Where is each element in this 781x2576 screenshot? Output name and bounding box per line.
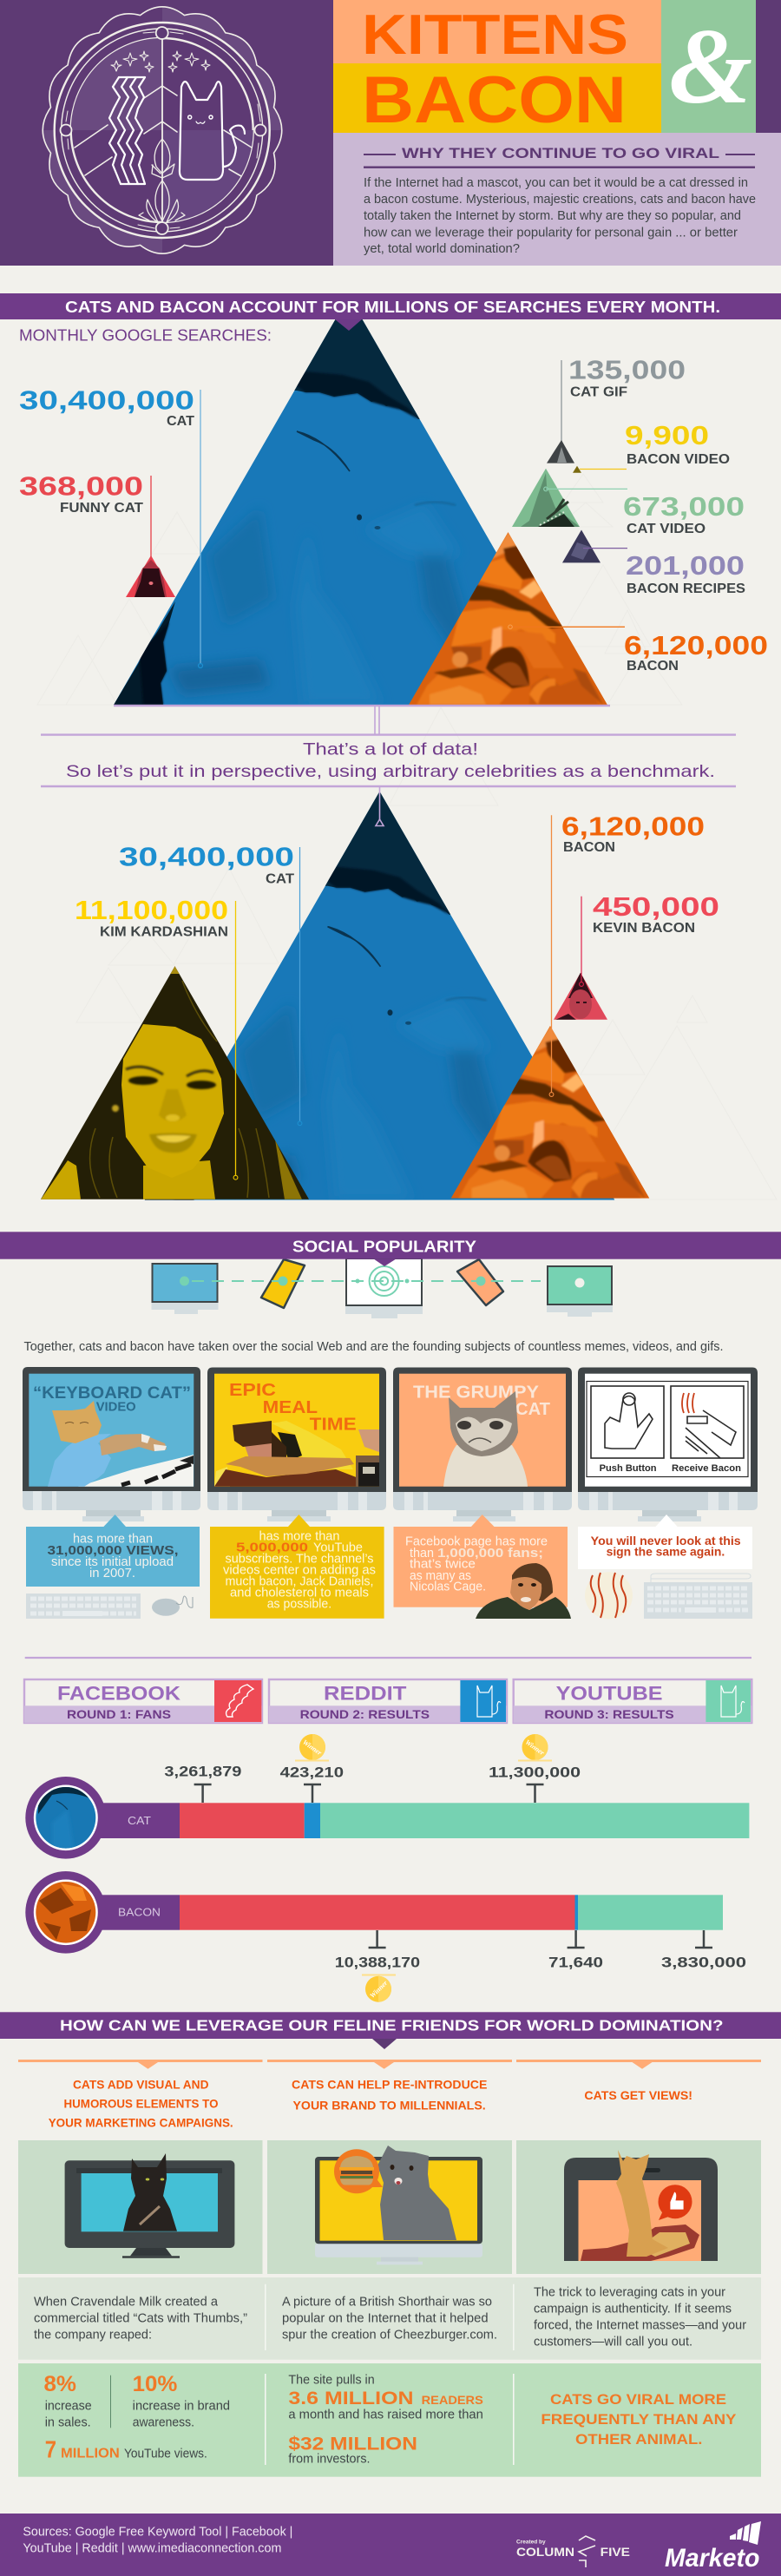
panel: reddit round header	[269, 1679, 507, 1723]
bar chart: bacon: BACON	[118, 1906, 161, 1919]
stat: cravendale results: YouTube views.	[124, 2448, 207, 2461]
screen title: CAT	[515, 1400, 550, 1419]
panel: bacon button monitor: Receive Bacon	[672, 1463, 741, 1474]
data label: cat video 673,000	[544, 487, 745, 536]
callout: never look at this sign: You will never look at this	[591, 1534, 741, 1548]
text block: that's a lot of data: So let’s put it in perspective, using arbitrary celebrities as a benchmark.	[66, 762, 715, 781]
value marker: cat youtube	[489, 1764, 581, 1803]
stat: cravendale results: MILLION	[61, 2447, 120, 2461]
text block: that's a lot of data: That’s a lot of data!	[303, 740, 478, 759]
stat: cravendale results: 10%	[133, 2372, 177, 2396]
stat: cravendale results: awareness.	[133, 2416, 194, 2430]
stat: cravendale results: 8%	[43, 2372, 76, 2396]
bar chart: cat	[25, 1777, 749, 1859]
logo: marketo: Marketo	[665, 2544, 759, 2573]
stat: cheezburger results: The site pulls in	[288, 2374, 375, 2388]
title block: ampersand	[661, 0, 781, 133]
stat: cravendale results: 7	[45, 2436, 56, 2463]
panel: youtube round header	[514, 1679, 751, 1723]
panel: orange cat phone	[516, 2140, 761, 2274]
panel: case study text	[18, 2277, 761, 2360]
image: orange cat	[616, 2150, 668, 2257]
panel: reddit round header: ROUND 2: RESULTS	[300, 1707, 430, 1721]
banner: leverage heading: HOW CAN WE LEVERAGE OUR FELINE FRIENDS FOR WORLD DOMINATION?	[60, 2016, 724, 2034]
text block: cravendale	[34, 2296, 247, 2343]
callout: keyboard cat views: in 2007.	[89, 1567, 135, 1580]
triangle chart: benchmark, kim kardashian	[41, 966, 309, 1199]
callout: cats go viral	[541, 2391, 737, 2448]
callout: never look at this sign: sign the same again.	[607, 1545, 725, 1559]
icon: winner medal facebook	[362, 1974, 396, 2002]
screen title: “KEYBOARD CAT”	[33, 1384, 191, 1403]
value marker: cat youtube: 11,300,000	[489, 1764, 581, 1780]
data label: kevin bacon: KEVIN BACON	[593, 921, 695, 936]
callout: cats go viral: FREQUENTLY THAN ANY	[541, 2411, 737, 2428]
stat: cravendale results	[43, 2372, 230, 2463]
data label: benchmark bacon	[549, 811, 705, 1096]
screen title: VIDEO	[96, 1399, 136, 1414]
logo: column five: FIVE	[601, 2546, 630, 2559]
data label: funny cat 368,000: FUNNY CAT	[60, 501, 143, 516]
stat: cheezburger results: from investors.	[288, 2453, 370, 2467]
title block: BACON: BACON	[362, 63, 627, 137]
panel: facebook round header: ROUND 1: FANS	[67, 1707, 171, 1721]
triangle chart: monthly searches, bacon	[409, 532, 607, 705]
data label: bacon video 9,900	[573, 420, 730, 473]
data label: funny cat 368,000	[19, 470, 175, 597]
text block: british shorthair	[282, 2296, 497, 2343]
banner: searches heading: CATS AND BACON ACCOUNT FOR MILLIONS OF SEARCHES EVERY MONTH.	[65, 299, 720, 316]
data label: benchmark bacon: 6,120,000	[561, 811, 705, 841]
value marker: cat facebook	[164, 1764, 241, 1803]
intro panel	[333, 133, 781, 266]
icon: center monitor	[345, 1258, 423, 1318]
callout: epic meal time subscribers: videos center on adding as	[223, 1564, 376, 1578]
data label: bacon recipes 201,000: 201,000	[626, 550, 745, 581]
column heading: re-introduce brand: YOUR BRAND TO MILLENNIALS.	[293, 2099, 486, 2113]
icon: bacon wave and keyboard	[585, 1572, 752, 1619]
value marker: bacon reddit: 71,640	[548, 1955, 603, 1971]
intro paragraph: If the Internet had a mascot, you can bet it would be a cat dressed in	[364, 176, 748, 190]
panel: results	[18, 2363, 761, 2477]
panel: black cat monitor	[18, 2140, 262, 2274]
icon: left phone	[261, 1259, 305, 1308]
callout: grumpy cat fans: 1,000,000 fans;	[437, 1546, 543, 1561]
header: left purple seal panel	[0, 0, 333, 269]
callout: grumpy cat fans: as many as	[410, 1569, 471, 1583]
banner: social popularity: SOCIAL POPULARITY	[292, 1238, 476, 1255]
avatar: cat	[25, 1777, 106, 1859]
data label: benchmark cat: CAT	[266, 871, 294, 886]
callout: epic meal time subscribers: subscribers. The channel’s	[226, 1553, 373, 1567]
data label: cat video 673,000: CAT VIDEO	[627, 522, 706, 536]
callout: grumpy cat fans: than	[410, 1547, 434, 1561]
logo: marketo	[665, 2521, 761, 2573]
image: black cat	[123, 2153, 177, 2231]
data label: benchmark cat	[119, 842, 302, 1126]
value marker: cat reddit: 423,210	[280, 1764, 344, 1780]
icon: winner medal youtube	[518, 1734, 552, 1762]
intro paragraph: how can we leverage their popularity for personal gain ... or better	[364, 226, 738, 240]
icon: cat	[477, 1686, 501, 1717]
text block: british shorthair: spur the creation of Cheezburger.com.	[282, 2329, 497, 2343]
stat: cravendale results: increase	[45, 2400, 92, 2414]
image: grumpy cat	[443, 1391, 528, 1487]
text block: cravendale: the company reaped:	[34, 2329, 152, 2343]
triangle: bacon recipes	[562, 529, 601, 562]
icon: winner medal reddit	[295, 1734, 329, 1762]
icon: winner medal reddit: Winner	[301, 1738, 324, 1758]
icon: leaves	[139, 139, 185, 222]
triangle: kevin bacon	[554, 972, 607, 1020]
column heading: cats add visual: HUMOROUS ELEMENTS TO	[64, 2097, 219, 2111]
panel: keyboard cat monitor	[23, 1367, 200, 1521]
icon: left monitor	[151, 1264, 219, 1314]
data label: benchmark bacon: BACON	[563, 840, 615, 855]
panel: reddit round header: REDDIT	[324, 1683, 407, 1705]
panel: grumpy cat monitor	[393, 1368, 572, 1521]
divider	[25, 1657, 751, 1659]
text block: authenticity: forced, the Internet masses—and your	[534, 2319, 746, 2333]
image: bacon base	[581, 2224, 699, 2261]
value marker: bacon facebook	[335, 1930, 420, 1971]
callout: cats go viral: OTHER ANIMAL.	[575, 2431, 702, 2448]
data label: benchmark kim kardashian: KIM KARDASHIAN	[100, 924, 228, 939]
banner: searches heading	[0, 293, 781, 331]
screen title: EPIC	[229, 1381, 276, 1400]
callout: epic meal time subscribers: much bacon, Jack Daniels,	[226, 1575, 373, 1589]
data label: bacon 6,120,000: 6,120,000	[624, 630, 768, 660]
screen title	[413, 1383, 550, 1419]
callout: epic meal time subscribers: 5,000,000	[236, 1541, 308, 1555]
data label: cat 30,400,000: CAT	[167, 414, 194, 429]
panel: facebook round header: FACEBOOK	[57, 1683, 180, 1705]
banner: leverage heading	[0, 2012, 781, 2049]
screen title	[33, 1384, 191, 1414]
panel: bacon button monitor	[578, 1368, 758, 1521]
value marker: bacon reddit	[548, 1930, 603, 1971]
avatar: bacon	[25, 1871, 106, 1954]
logo: column five: COLUMN	[516, 2546, 574, 2559]
triangle: cat gif	[547, 440, 574, 463]
data label: bacon recipes 201,000	[583, 549, 745, 596]
callout: grumpy cat fans: Facebook page has more	[405, 1535, 548, 1549]
panel: youtube round header: YOUTUBE	[556, 1683, 663, 1705]
intro paragraph: a bacon costume. Mysterious, majestic creations, cats and bacon have	[364, 193, 756, 207]
footer	[0, 2514, 781, 2576]
stat: cravendale results: in sales.	[45, 2416, 91, 2430]
sources: Sources: Google Free Keyword Tool | Facebook |	[23, 2526, 292, 2540]
triangle chart: benchmark, bacon	[451, 1026, 649, 1199]
callout: epic meal time subscribers	[210, 1515, 384, 1619]
image: man on sandwich	[214, 1421, 379, 1487]
screen title: MEAL	[263, 1398, 318, 1417]
data label: bacon video 9,900: BACON VIDEO	[627, 452, 730, 467]
data label: bacon recipes 201,000: BACON RECIPES	[627, 582, 745, 596]
icon: bacon	[226, 1685, 253, 1717]
icon: cat	[721, 1686, 745, 1717]
title block: KITTENS: KITTENS	[362, 3, 628, 66]
top connector to benchmark chart	[376, 786, 384, 826]
bar chart: bacon	[25, 1871, 723, 1954]
column heading: cats get views	[516, 2060, 761, 2102]
column heading: cats get views: CATS GET VIEWS!	[584, 2088, 692, 2102]
column heading: re-introduce brand: CATS CAN HELP RE-INTRODUCE	[292, 2078, 487, 2092]
text block: that's a lot of data	[66, 740, 715, 781]
panel: youtube round header: ROUND 3: RESULTS	[544, 1707, 674, 1721]
column heading: cats add visual: CATS ADD VISUAL AND	[73, 2078, 208, 2092]
stat: cheezburger results: $32 MILLION	[288, 2435, 417, 2454]
callout: keyboard cat views	[26, 1515, 200, 1587]
data label: cat 30,400,000: 30,400,000	[19, 385, 194, 416]
icon: winner medal facebook: Winner	[368, 1979, 390, 2000]
intro paragraph: totally taken the Internet by storm. But why are they so popular, and	[364, 209, 741, 223]
data label: benchmark kim kardashian	[75, 895, 238, 1180]
callout: grumpy cat fans	[394, 1515, 571, 1619]
title block: ampersand: &	[669, 7, 752, 126]
value marker: bacon facebook: 10,388,170	[335, 1955, 420, 1971]
callout: epic meal time subscribers: has more than	[259, 1530, 340, 1544]
value marker: cat reddit	[280, 1764, 344, 1803]
data label: cat 30,400,000	[19, 385, 203, 668]
callout: keyboard cat views: 31,000,000 VIEWS,	[47, 1543, 179, 1558]
callout: grumpy cat fans: that’s twice	[410, 1558, 476, 1572]
callout: never look at this sign	[578, 1515, 752, 1569]
sources: YouTube | Reddit | www.imediaconnection.com	[23, 2542, 281, 2556]
triangle: funny cat	[126, 555, 175, 597]
icon: right monitor	[547, 1266, 613, 1317]
value marker: bacon youtube: 3,830,000	[661, 1955, 746, 1971]
callout: cats go viral: CATS GO VIRAL MORE	[550, 2391, 726, 2408]
stat: cheezburger results: READERS	[422, 2393, 483, 2407]
icon: winner medal youtube: Winner	[524, 1738, 547, 1758]
text block: british shorthair: popular on the Internet that it helped	[282, 2312, 489, 2326]
callout: keyboard cat views: since its initial upload	[51, 1555, 174, 1569]
value marker: cat facebook: 3,261,879	[164, 1764, 241, 1780]
panel: facebook round header	[24, 1679, 262, 1723]
data label: cat gif 135,000	[547, 354, 686, 463]
column heading: cats add visual: YOUR MARKETING CAMPAIGNS.	[49, 2116, 233, 2130]
data label: funny cat 368,000: 368,000	[19, 470, 143, 501]
sources	[23, 2526, 292, 2556]
value marker: bacon youtube	[661, 1930, 746, 1971]
triangle chart: monthly searches, cat	[114, 319, 496, 705]
stat: cheezburger results: 3.6 MILLION	[288, 2389, 413, 2408]
callout: keyboard cat views: has more than	[73, 1533, 153, 1547]
triangle chart: benchmark, cat	[144, 786, 614, 1200]
text block: authenticity: customers—will call you out.	[534, 2336, 692, 2349]
callout: grumpy cat fans: Nicolas Cage.	[410, 1580, 486, 1594]
data label: cat gif 135,000: 135,000	[568, 354, 686, 384]
stat: cravendale results: increase in brand	[133, 2400, 230, 2414]
stat: cheezburger results: a month and has raised more than	[288, 2408, 483, 2422]
text block: authenticity: campaign is authenticity. If it seems	[534, 2303, 732, 2316]
panel: epic meal time monitor	[207, 1368, 386, 1521]
screen title	[229, 1381, 357, 1435]
stat: cheezburger results	[288, 2374, 483, 2467]
icon: thumbs up bubble	[658, 2185, 692, 2220]
logo: column five	[516, 2536, 630, 2567]
data label: benchmark kim kardashian: 11,100,000	[75, 895, 228, 925]
connector lines	[41, 706, 736, 786]
image: keyboard cat	[48, 1401, 194, 1487]
intro paragraph: yet, total world domination?	[364, 242, 520, 256]
triangle: cat video	[512, 469, 580, 527]
icon: burger speech bubble	[334, 2149, 383, 2193]
bar chart: cat: CAT	[128, 1814, 151, 1827]
faint background triangles	[37, 474, 777, 1199]
data label: bacon video 9,900: 9,900	[625, 420, 709, 450]
icon: keyboard and mouse	[26, 1594, 193, 1619]
subtitle: WHY THEY CONTINUE TO GO VIRAL	[402, 145, 719, 161]
data label: kevin bacon: 450,000	[593, 891, 719, 922]
text block: cravendale: commercial titled “Cats with Thumbs,”	[34, 2312, 247, 2326]
text block: cravendale: When Cravendale Milk created a	[34, 2296, 219, 2310]
callout: epic meal time subscribers: YouTube	[313, 1541, 363, 1555]
subheading: monthly google searches: MONTHLY GOOGLE SEARCHES:	[19, 325, 272, 344]
text block: authenticity: The trick to leveraging cats in your	[534, 2286, 725, 2300]
panel: bacon button monitor: Push Button	[600, 1463, 657, 1474]
data label: kevin bacon	[580, 891, 719, 986]
data label: bacon 6,120,000	[509, 625, 768, 674]
image: push button sign	[587, 1382, 748, 1477]
arrow: dashed connector	[180, 1276, 585, 1288]
callout: epic meal time subscribers: as possible.	[267, 1598, 331, 1612]
icon: right phone	[457, 1259, 503, 1305]
icon: cat outline	[180, 82, 245, 180]
text block: authenticity	[534, 2286, 746, 2349]
logo: column five: Created by	[516, 2540, 546, 2546]
banner: social popularity	[0, 1232, 781, 1266]
icon: bacon strip	[109, 77, 145, 184]
data label: cat gif 135,000: CAT GIF	[570, 384, 627, 399]
column heading: cats add visual	[18, 2060, 262, 2130]
intro paragraph	[364, 176, 756, 256]
text block: social intro: Together, cats and bacon have taken over the social Web and are the founding subjects of countless memes, videos, and gifs.	[24, 1340, 724, 1354]
data label: bacon 6,120,000: BACON	[627, 659, 679, 674]
image: grey cat	[377, 2146, 456, 2240]
column heading: re-introduce brand	[267, 2060, 512, 2113]
text block: british shorthair: A picture of a British Shorthair was so	[282, 2296, 492, 2310]
device network icons	[151, 1258, 613, 1318]
callout: epic meal time subscribers: and cholesterol to meals	[230, 1587, 369, 1600]
data label: benchmark cat: 30,400,000	[119, 842, 294, 872]
screen title: TIME	[310, 1416, 357, 1435]
screen title: THE GRUMPY	[413, 1383, 540, 1403]
data label: cat video 673,000: 673,000	[623, 491, 745, 522]
icon: seal with bacon and cat	[42, 6, 283, 254]
panel: grey cat monitor	[267, 2140, 512, 2274]
image: nicolas cage	[476, 1563, 571, 1619]
